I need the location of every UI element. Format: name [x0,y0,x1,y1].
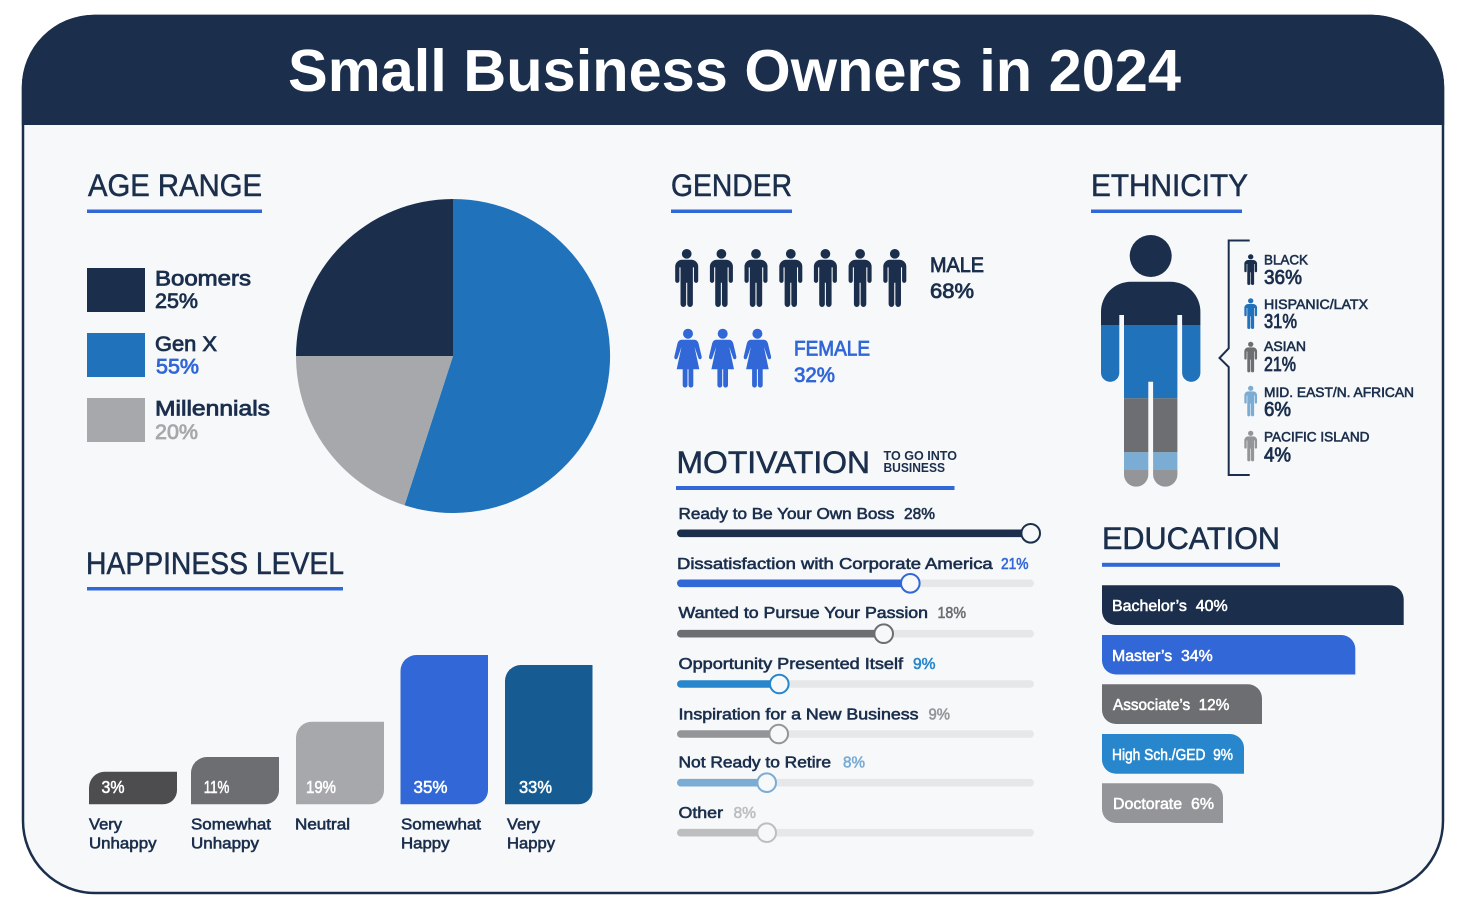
heading: motivation: TO GO INTO [884,449,957,463]
item: middle east / north african: 6% [1264,399,1291,421]
label: male [930,254,984,303]
item: pacific island: PACIFIC ISLAND [1264,429,1370,445]
heading: motivation: BUSINESS [884,461,945,475]
item: asian: ASIAN [1264,338,1306,354]
label: female: FEMALE [794,338,870,361]
bar: doctorate: Doctorate 6% [1113,796,1214,813]
legend: boomers [87,268,251,313]
panel: age range [87,167,610,513]
item: pacific island [1244,429,1370,467]
slider: wanted to pursue your passion [677,605,1034,643]
bar: very happy: Happy [507,835,555,852]
slider: inspiration for a new business [677,706,1034,743]
label: male: MALE [930,254,984,277]
title: Small Business Owners in 2024 [288,38,1181,104]
bar: very unhappy: Very [89,816,122,833]
slider: other [677,805,1034,842]
slider: not ready to retire: 8% [843,755,865,772]
icons: male figures [675,249,906,307]
slider: other: 8% [734,805,756,822]
legend: gen x: Gen X [155,333,217,356]
slider: other: Other [678,805,724,822]
bar: somewhat happy: Happy [401,835,450,852]
legend: gen x: 55% [156,356,199,378]
panel: education [1102,520,1404,823]
bar: very unhappy [89,772,177,852]
slider: opportunity presented itself [677,656,1034,693]
slider: not ready to retire [677,755,1034,792]
slider: ready to be your own boss [677,506,1040,543]
heading: age range: AGE RANGE [88,167,262,203]
item: black: BLACK [1264,252,1309,268]
label: female: 32% [794,364,835,387]
item: hispanic/latx: HISPANIC/LATX [1264,296,1369,312]
label: female [794,338,870,387]
item: middle east / north african: MID. EAST/N. AFRICAN [1264,384,1414,400]
legend: millennials: Millennials [155,398,270,420]
bar: very happy: Very [507,816,540,833]
slider: ready to be your own boss: Ready to Be Your Own Boss [678,506,894,523]
bar: somewhat unhappy: Unhappy [191,835,259,852]
panel: motivation [676,444,1040,842]
slider: inspiration for a new business: Inspiration for a New Business [678,706,918,723]
item: hispanic/latx: 31% [1264,311,1297,333]
bar: master's: Master’s 34% [1112,648,1213,665]
bar: very happy: 33% [519,777,552,797]
panel: happiness level [86,545,592,852]
bar: neutral: Neutral [295,816,350,833]
item: black [1244,252,1309,289]
heading: motivation [676,444,957,490]
heading: education: EDUCATION [1102,520,1280,556]
slider: wanted to pursue your passion: 18% [938,605,966,622]
bar: very happy [505,665,592,852]
item: black: 36% [1264,267,1302,289]
slider: dissatisfaction with corporate america [677,556,1034,593]
bar: somewhat happy: Somewhat [401,816,482,833]
slider: dissatisfaction with corporate america: Dissatisfaction with Corporate America [677,556,993,573]
legend: gen x [87,333,217,378]
bar: high school / ged [1102,734,1244,774]
bar: somewhat unhappy: Somewhat [191,816,272,833]
heading: ethnicity: ETHNICITY [1091,167,1248,203]
legend: boomers: 25% [155,290,198,313]
bar: very unhappy: Unhappy [89,835,156,852]
bar: somewhat happy [400,655,488,852]
slider: opportunity presented itself: 9% [913,656,936,673]
icon: large figure with colour bands [1101,235,1200,487]
bar: associate's: Associate’s 12% [1113,697,1229,714]
bar: doctorate [1102,783,1223,823]
bar: neutral: 19% [306,777,336,797]
item: middle east / north african [1244,384,1414,421]
legend: boomers: Boomers [155,268,251,290]
bar: bachelor's: Bachelor’s 40% [1112,598,1228,615]
icons: female figures [674,329,771,388]
bar: associate's [1102,684,1262,724]
item: pacific island: 4% [1264,445,1291,467]
slider: dissatisfaction with corporate america: 21% [1001,556,1028,573]
slider: not ready to retire: Not Ready to Retire [678,755,831,772]
item: asian [1244,338,1306,376]
item: asian: 21% [1264,354,1296,376]
slider: ready to be your own boss: 28% [904,506,935,523]
legend: millennials [87,398,270,444]
heading: motivation: MOTIVATION [676,444,870,480]
panel: ethnicity [1091,167,1414,490]
bar: neutral [295,722,384,833]
bar: master's [1102,635,1355,674]
bar: somewhat unhappy: 11% [204,777,229,797]
heading: happiness level: HAPPINESS LEVEL [86,545,344,581]
label: male: 68% [930,280,974,303]
header banner [22,15,1444,125]
bar: somewhat happy: 35% [414,777,448,797]
slider: inspiration for a new business: 9% [928,706,950,723]
bar: high school / ged: High Sch./GED 9% [1112,747,1233,764]
panel: gender [671,167,984,388]
slider: wanted to pursue your passion: Wanted to Pursue Your Passion [678,605,928,622]
legend: millennials: 20% [155,421,198,444]
bar: bachelor's [1102,585,1404,625]
bar: somewhat unhappy [191,757,279,852]
item: hispanic/latx [1244,296,1369,333]
bar: very unhappy: 3% [102,777,124,797]
pie chart [296,199,610,513]
heading: gender: GENDER [671,167,792,203]
slider: opportunity presented itself: Opportunity Presented Itself [678,656,904,673]
bracket [1220,240,1250,475]
